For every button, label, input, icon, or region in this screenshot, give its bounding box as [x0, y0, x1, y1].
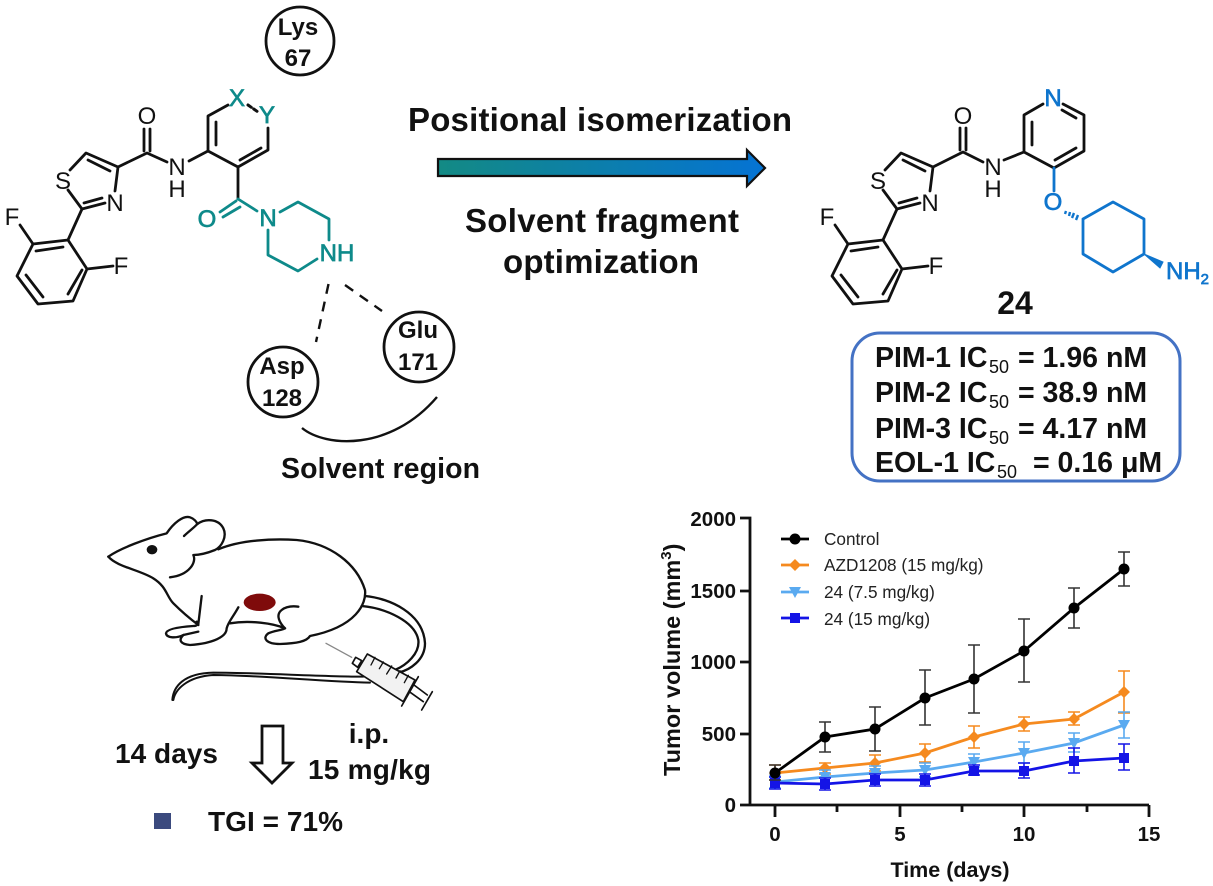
y-axis tick labels — [690, 508, 736, 817]
series: control — [769, 552, 1130, 780]
compound 24: blue fragment: NH — [1166, 258, 1201, 285]
lead molecule: teal solvent fragment — [198, 85, 354, 271]
lead molecule: black atom labels — [5, 103, 186, 280]
x-axis title: Time (days) — [890, 858, 1010, 882]
heading: solvent fragment optimization — [465, 202, 739, 280]
label: TGI: TGI = 71% — [208, 806, 343, 837]
compound 24: black atom labels: F — [929, 253, 943, 280]
potency box: 50 — [989, 428, 1009, 448]
lead molecule structure — [5, 85, 354, 304]
residue: Lys 67: 67 — [285, 45, 311, 72]
lead molecule: black atom labels: H — [168, 176, 186, 203]
potency box: PIM-2 IC — [875, 377, 987, 409]
lead molecule: black atom labels: S — [55, 168, 71, 195]
heading: positional isomerization: Positional isomerization — [408, 101, 792, 138]
compound 24: black atom labels: O — [954, 103, 972, 130]
hollow down arrow — [252, 726, 292, 783]
label: 14 days: 14 days — [115, 738, 218, 769]
legend entry: 24 at 15 mg/kg: 24 (15 mg/kg) — [824, 609, 930, 629]
solvent region arc — [302, 397, 437, 441]
potency box: EOL-1 IC — [875, 447, 995, 479]
legend entry: 24 at 7.5 mg/kg: 24 (7.5 mg/kg) — [824, 582, 935, 602]
legend square — [154, 813, 171, 829]
potency box — [852, 333, 1180, 482]
mouse body outline — [108, 517, 365, 645]
lead molecule: teal solvent fragment: Y — [259, 102, 275, 129]
series: 24 at 15 mg/kg — [769, 744, 1130, 790]
legend entry: control — [781, 529, 879, 549]
line chart: tumor volume — [658, 508, 1160, 882]
residue: Asp 128 — [248, 347, 318, 417]
x-axis tick labels: 5 — [894, 823, 906, 846]
compound 24: black scaffold — [832, 104, 1084, 304]
compound 24: blue fragment: O — [1044, 189, 1062, 216]
compound 24: black atom labels: S — [870, 168, 886, 195]
potency box: 50 — [989, 392, 1009, 412]
compound 24: black atom labels: N — [984, 154, 1002, 181]
potency box: 50 — [989, 357, 1009, 377]
potency box: PIM-1 IC — [875, 342, 987, 374]
mouse eye — [147, 545, 157, 554]
label: dosing: i.p. — [349, 718, 389, 749]
label: dosing: 15 mg/kg — [308, 754, 431, 785]
legend entry: control: Control — [824, 529, 879, 549]
mouse tail — [172, 596, 425, 700]
potency box: = 4.17 nM — [1018, 413, 1147, 445]
residue: Glu 171: 171 — [398, 349, 438, 376]
potency box: = 38.9 nM — [1018, 377, 1147, 409]
legend entry: AZD1208: AZD1208 (15 mg/kg) — [824, 555, 984, 575]
x-axis tick labels — [769, 823, 1160, 846]
y-axis title: 3 — [658, 551, 675, 560]
heading: solvent fragment optimization: optimization — [503, 243, 699, 280]
residue: Lys 67 — [266, 7, 334, 75]
potency box: PIM-3 IC — [875, 413, 987, 445]
residue: Lys 67: Lys — [278, 14, 318, 41]
lead molecule: black atom labels: N — [106, 190, 124, 217]
residue: Glu 171: Glu — [398, 317, 438, 344]
series: 24 at 7.5 mg/kg — [769, 712, 1130, 788]
mouse illustration with syringe — [108, 517, 432, 710]
residue: Asp 128: Asp — [259, 353, 305, 380]
y-axis tick labels: 1500 — [690, 580, 736, 603]
compound 24: blue fragment — [1044, 85, 1209, 288]
chart legend — [781, 529, 984, 629]
y-axis tick labels: 1000 — [690, 651, 736, 674]
compound number 24: 24 — [997, 285, 1033, 321]
solvent region label: Solvent region — [281, 453, 480, 485]
compound 24: blue fragment: N — [1044, 85, 1062, 112]
potency box: = 0.16 μM — [1033, 447, 1162, 479]
lead molecule: black atom labels: O — [138, 103, 156, 130]
label: dosing — [308, 718, 431, 785]
compound 24: blue fragment: 2 — [1201, 271, 1209, 288]
lead molecule: black scaffold — [17, 105, 268, 304]
y-axis tick labels: 0 — [725, 794, 736, 817]
heading: solvent fragment optimization: Solvent fragment — [465, 202, 739, 239]
lead molecule: black atom labels: F — [5, 204, 19, 231]
residue: Glu 171 — [384, 312, 454, 382]
potency box: = 1.96 nM — [1018, 342, 1147, 374]
chart axes — [740, 518, 1149, 817]
x-axis tick labels: 0 — [769, 823, 781, 846]
syringe — [326, 643, 432, 710]
lead molecule: teal solvent fragment: X — [229, 85, 245, 112]
residue: Asp 128: 128 — [262, 385, 302, 412]
compound 24: black atom labels: F — [820, 204, 834, 231]
potency box: 50 — [997, 462, 1017, 482]
gradient arrow — [438, 150, 765, 186]
x-axis tick labels: 15 — [1138, 823, 1160, 846]
compound 24: black atom labels: N — [921, 190, 939, 217]
lead molecule: teal solvent fragment: NH — [320, 240, 354, 267]
y-axis title: ) — [659, 544, 685, 551]
y-axis tick labels: 500 — [702, 723, 736, 746]
series: AZD1208 15 mg/kg — [769, 671, 1130, 780]
lead molecule: black atom labels: N — [168, 154, 186, 181]
compound 24: black atom labels — [820, 103, 1002, 280]
hydrogen-bond dashes — [316, 284, 382, 342]
y-axis tick labels: 2000 — [690, 508, 736, 531]
x-axis tick labels: 10 — [1013, 823, 1035, 846]
tumor — [244, 594, 276, 611]
lead molecule: black atom labels: F — [114, 253, 128, 280]
compound 24 structure — [820, 85, 1209, 304]
compound 24: black atom labels: H — [984, 176, 1002, 203]
y-axis title: Tumor volume (mm — [659, 560, 685, 776]
lead molecule: teal solvent fragment: N — [259, 205, 277, 232]
lead molecule: teal solvent fragment: O — [198, 206, 216, 233]
